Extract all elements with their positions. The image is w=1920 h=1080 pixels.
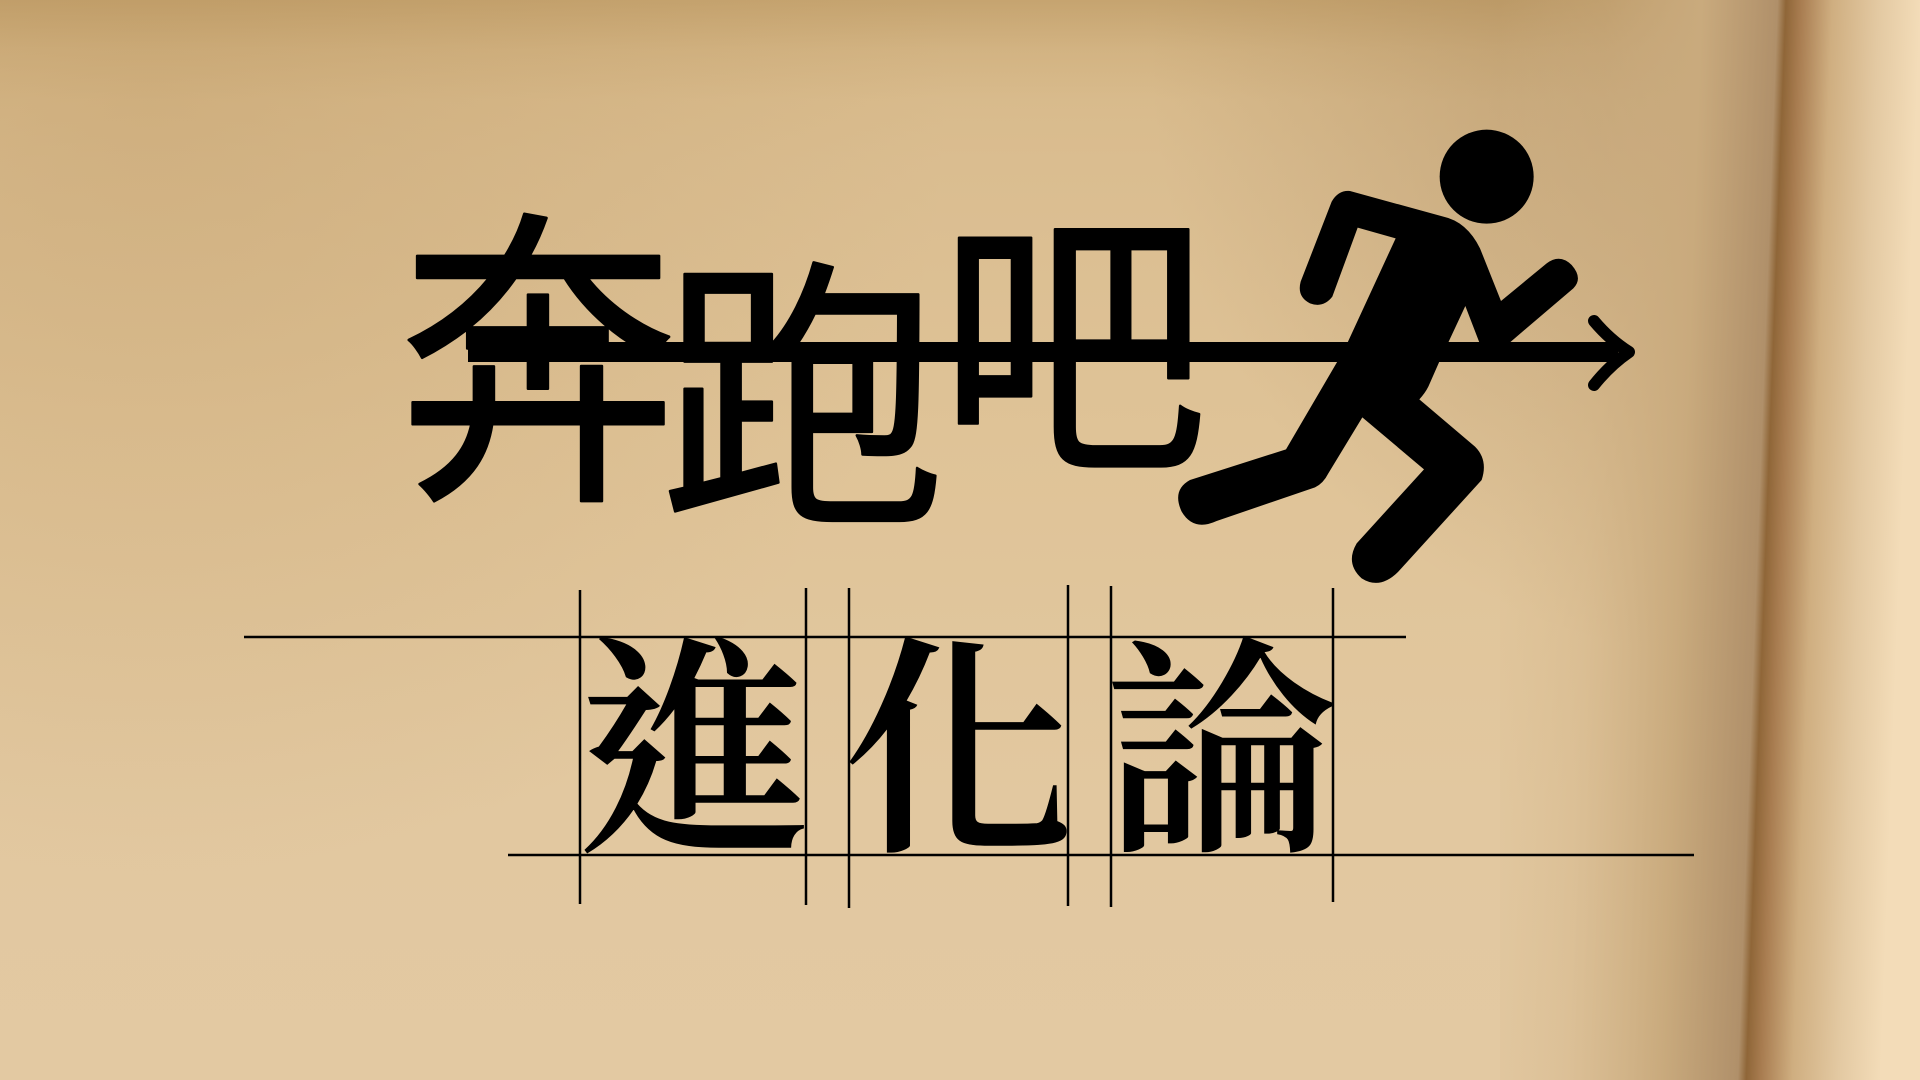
subtitle character 進: 進 (578, 627, 810, 884)
subtitle: 進化論 (578, 627, 1337, 884)
subtitle character 化: 化 (843, 627, 1075, 884)
title character 跑: 跑 (660, 243, 946, 563)
runner head (1440, 130, 1534, 224)
subtitle character 論: 論 (1105, 627, 1337, 884)
guide lines around subtitle (244, 585, 1694, 908)
title: 奔跑吧 (398, 192, 1208, 563)
runner body and limbs (1178, 191, 1578, 583)
title character 吧: 吧 (938, 192, 1208, 509)
icon: running figure (1178, 130, 1578, 583)
title character 奔: 奔 (398, 194, 678, 542)
arrow through title (468, 321, 1629, 385)
